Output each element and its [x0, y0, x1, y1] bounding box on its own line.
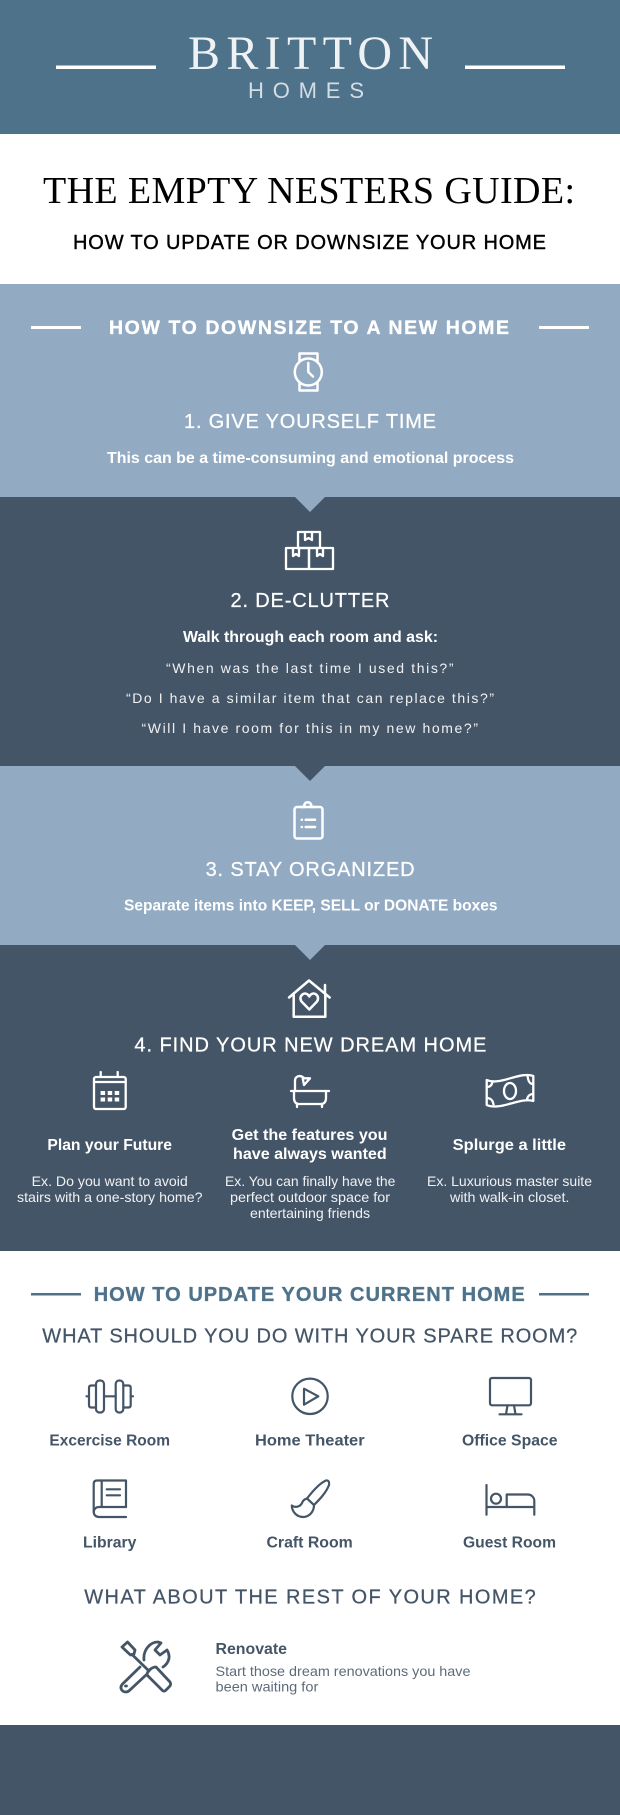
- column text: [427, 1173, 592, 1205]
- icon: dumbbell: [86, 1380, 133, 1412]
- quote 2: “Do I have a similar item that can replace this?”: [126, 690, 494, 706]
- item: craft room: [266, 1480, 353, 1552]
- step description: This can be a time-consuming and emotional process: [107, 450, 514, 467]
- column text: stairs with a one-story home?: [17, 1189, 203, 1205]
- column text: perfect outdoor space for: [230, 1189, 390, 1205]
- column: plan your future: [17, 1072, 203, 1205]
- arrow: [295, 945, 325, 960]
- step heading: 1. GIVE YOURSELF TIME: [184, 411, 436, 433]
- column text: Ex. Luxurious master suite: [427, 1173, 592, 1189]
- label: Library: [83, 1535, 136, 1552]
- label: Excercise Room: [49, 1433, 170, 1450]
- step heading: 3. STAY ORGANIZED: [206, 859, 415, 881]
- icon: play button: [292, 1379, 328, 1414]
- panel: how to update your current home: [0, 1251, 620, 1725]
- panel: step 4 find your new dream home: [0, 945, 620, 1251]
- item text: [216, 1663, 471, 1695]
- logo: Britton: BRITTON: [188, 27, 433, 80]
- icon: monitor: [490, 1378, 531, 1414]
- step heading: 2. DE-CLUTTER: [230, 590, 390, 612]
- panel: brand header: [0, 0, 620, 134]
- arrow: [295, 497, 325, 512]
- subheading: rest of your home: WHAT ABOUT THE REST OF YOUR HOME?: [84, 1587, 536, 1609]
- column: get the features: [225, 1076, 396, 1221]
- subheading: spare room: WHAT SHOULD YOU DO WITH YOUR SPARE ROOM?: [42, 1326, 577, 1348]
- heading: how to downsize: HOW TO DOWNSIZE TO A NEW HOME: [109, 317, 509, 339]
- label: Home Theater: [255, 1433, 365, 1450]
- column heading: [232, 1127, 388, 1163]
- item: office space: [462, 1378, 558, 1450]
- item: home theater: [255, 1379, 365, 1450]
- column heading: Plan your Future: [47, 1137, 172, 1154]
- column text: [17, 1173, 203, 1205]
- panel: step 2 de-clutter: [0, 497, 620, 766]
- item: renovate: [121, 1641, 471, 1695]
- column text: Ex. You can finally have the: [225, 1173, 396, 1189]
- column heading: have always wanted: [233, 1146, 387, 1163]
- column text: entertaining friends: [250, 1205, 370, 1221]
- column text: with walk-in closet.: [449, 1189, 569, 1205]
- icon: bathtub: [291, 1076, 329, 1107]
- title: THE EMPTY NESTERS GUIDE:: [43, 170, 575, 212]
- heading: how to update: HOW TO UPDATE YOUR CURRENT HOME: [94, 1284, 525, 1306]
- quote 3: “Will I have room for this in my new home?”: [142, 720, 478, 736]
- item: library: [83, 1480, 136, 1552]
- column: splurge a little: [427, 1075, 592, 1205]
- label: Craft Room: [266, 1535, 353, 1552]
- icon: bed: [486, 1485, 534, 1515]
- item: exercise room: [49, 1380, 170, 1450]
- icon: book: [94, 1480, 126, 1517]
- column text: Ex. Do you want to avoid: [32, 1173, 188, 1189]
- icon: clipboard: [294, 802, 322, 838]
- column text: [225, 1173, 396, 1221]
- intro: Walk through each room and ask:: [183, 629, 438, 646]
- item: guest room: [463, 1485, 556, 1552]
- icon: watch: [295, 354, 322, 390]
- label: Guest Room: [463, 1535, 556, 1552]
- logo: Homes: HOMES: [248, 78, 364, 103]
- panel: step 1 give yourself time: [0, 284, 620, 497]
- item text: been waiting for: [216, 1679, 319, 1695]
- item text: Start those dream renovations you have: [216, 1663, 471, 1679]
- arrow: [295, 766, 325, 781]
- panel: step 3 stay organized: [0, 766, 620, 945]
- subtitle: HOW TO UPDATE OR DOWNSIZE YOUR HOME: [73, 232, 546, 254]
- icon: boxes: [286, 532, 333, 569]
- step description: Separate items into KEEP, SELL or DONATE boxes: [124, 898, 498, 915]
- footer band: [0, 1725, 620, 1815]
- item heading: Renovate: [216, 1641, 287, 1658]
- icon: house with heart: [289, 980, 330, 1017]
- column heading: Splurge a little: [453, 1137, 566, 1154]
- step heading: 4. FIND YOUR NEW DREAM HOME: [134, 1035, 486, 1057]
- quote 1: “When was the last time I used this?”: [166, 660, 454, 676]
- label: Office Space: [462, 1433, 558, 1450]
- icon: tools: [121, 1642, 171, 1692]
- panel: title: [0, 134, 620, 284]
- icon: calendar: [94, 1072, 126, 1109]
- icon: money: [487, 1075, 533, 1107]
- column heading: Get the features you: [232, 1127, 388, 1144]
- icon: paintbrush: [292, 1480, 329, 1517]
